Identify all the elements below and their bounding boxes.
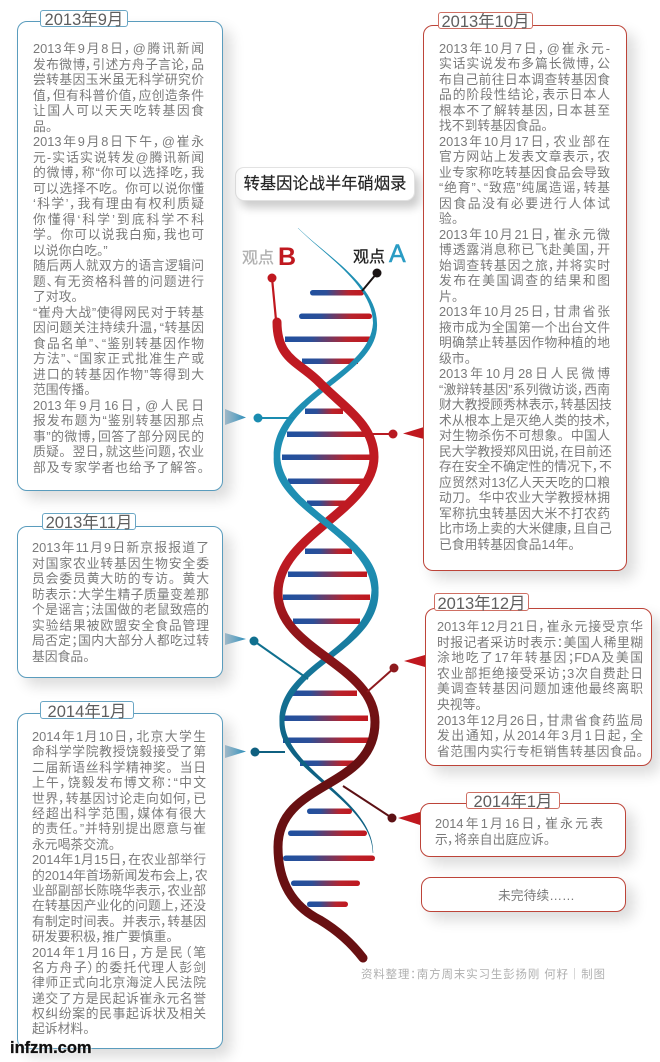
text: October events: “绝育”、“致癌”纯属造谣，转基: [439, 180, 610, 195]
heading: 2013年9月: 2013年9月: [45, 10, 123, 28]
text: January events viewpoint A: 有制定时间表。并表示，转基因: [32, 914, 206, 929]
text: November events: 局否定；国内大部分人都吃过转: [32, 633, 209, 648]
text: December events: 2013年12月26日，甘肃省食药监局: [437, 713, 643, 728]
text: October events: 业专家称吃转基因食品会导致: [439, 165, 610, 180]
text: to be continued: 未完待续……: [498, 888, 575, 903]
text: October events: 比市场上卖的大米健康，且自己: [439, 521, 612, 536]
text: December events: 2013年12月21日，崔永元接受京华: [437, 619, 643, 634]
label: viewpoint A: [353, 240, 406, 268]
heading: 2014年1月: 2014年1月: [474, 792, 552, 810]
text: October events: 明确禁止转基因作物种植的地: [439, 335, 610, 350]
text: September events: 发布微博，引述方舟子言论，品: [33, 57, 204, 72]
text: September events: [33, 41, 204, 475]
text: October events: 找不到转基因食品。: [439, 118, 548, 133]
title: [235, 167, 415, 201]
text: September events: 让国人可以天天吃转基因食: [33, 103, 204, 118]
text: January events viewpoint A: 的责任。”并特别提出愿意与崔: [32, 821, 206, 836]
text: September events: 随后两人就双方的语言逻辑问: [33, 258, 204, 273]
text: November events: 实验结果被欧盟安全食品管理: [32, 618, 209, 633]
text: December events: [437, 619, 643, 759]
text: December events: 央视等。: [437, 697, 482, 712]
text: January events viewpoint A: 递交了方是民起诉崔永元名誉: [32, 991, 206, 1006]
text: October events: 级市。: [439, 351, 471, 366]
text: January events viewpoint A: 永元喝茶交流。: [32, 837, 115, 852]
text: September events: 方法”、“国家正式批准生产或: [33, 351, 204, 366]
text: September events: 因问题关注持续升温，“转基因: [33, 320, 204, 335]
text: January events viewpoint A: 业部副部长陈晓华表示，农业部: [32, 883, 206, 898]
heading: 2013年11月: 2013年11月: [46, 514, 132, 532]
panel: September 2013: [17, 10, 236, 504]
strand B (red): [277, 322, 375, 958]
text: November events: 个是谣言；法国做的老鼠致癌的: [32, 602, 209, 617]
text: October events: 2013年10月17日，农业部在: [439, 134, 610, 149]
text: September events: 学。你可以说我白痴，我也可: [33, 227, 204, 242]
text: September events: 进口的转基因作物”等得到大: [33, 367, 204, 382]
panel: to be continued: [421, 877, 638, 924]
text: September events: 部及专家学者也给予了解答。: [33, 460, 204, 475]
text: October events: 掖市成为全国第一个出台文件: [439, 320, 610, 335]
text: September events: 值，但有科普价值，应创造条件: [33, 88, 204, 103]
arrow: January 2014 right to helix: [343, 786, 420, 825]
text: January events viewpoint A: [32, 729, 208, 1036]
text: September events: 题、有无资格科普的问题进行: [33, 274, 204, 289]
text: September events: 你懂得‘科学’到底科学不科: [33, 212, 204, 227]
text: October events: 民大学教授郑风田说，在目前还: [439, 444, 612, 459]
heading: 2013年10月: 2013年10月: [441, 12, 530, 30]
text: January events viewpoint A: 上午，饶毅发布博文称：“中文: [32, 775, 206, 790]
text: October events: 对生物杀伤不可想象。中国人: [439, 428, 610, 443]
text: September events: 报发布题为“鉴别转基因那点: [33, 413, 204, 428]
text: October events: [439, 41, 612, 552]
text: November events: 2013年11月9日新京报报道了: [32, 540, 209, 555]
text: January events viewpoint A: 2014年1月16日，方是民（笔: [32, 945, 206, 960]
connector: viewpoint B pin: [268, 274, 276, 320]
text: October events: 2013年10月28日人民微博: [439, 366, 610, 381]
text: November events: 对国家农业转基因生物安全委: [32, 556, 209, 571]
panel: October 2013: [423, 12, 640, 584]
text: September events: 可以选择不吃。你可以说你懂: [33, 181, 204, 196]
text: January events viewpoint A: 二届新语丝科学精神奖。当日: [32, 760, 206, 775]
text: September events: 2013年9月16日，@人民日: [33, 398, 204, 413]
DNA helix diagram with connectors: [225, 228, 425, 962]
text: October events: 2013年10月7日，@崔永元-: [439, 41, 610, 56]
arrow: November 2013 to helix: [225, 633, 308, 679]
text: December events: 美调查转基因问题加速他最终离职: [437, 681, 643, 696]
text: January events viewpoint A: 世界，转基因讨论走向如何，已: [32, 791, 206, 806]
label: viewpoint A: 观点: [353, 248, 385, 266]
text: October events: 博透露消息称已飞赴美国，开: [439, 242, 610, 257]
text: November events: 昉表示：大学生精子质量变差那: [32, 587, 209, 602]
arrow: September 2013 to helix: [225, 409, 294, 425]
text: October events: 已食用转基因食品14年。: [439, 537, 575, 552]
watermark: infzm.com: infzm.com: [10, 1039, 92, 1057]
text: September events: 2013年9月8日下午，@崔永: [33, 134, 204, 149]
text: January events viewpoint A: 2014年1月10日，北京大学生: [32, 729, 206, 744]
text: September events: 2013年9月8日，@腾讯新闻: [33, 41, 204, 56]
text: September events: 品。: [33, 119, 52, 134]
title: 转基因论战半年硝烟录: [244, 175, 406, 193]
strand A overlap at middle crossing: [295, 498, 358, 546]
text: January events viewpoint A: 名方舟子）的委托代理人彭剑: [32, 960, 206, 975]
text: October events: 存在安全不确定性的情况下，不: [439, 459, 612, 474]
text: January events viewpoint A: 命科学学院教授饶毅接受了第: [32, 744, 206, 759]
text: January events viewpoint A: 权纠纷案的民事起诉状及相关: [32, 1006, 206, 1021]
label: viewpoint B: [242, 243, 296, 271]
heading: 2013年12月: 2013年12月: [437, 594, 526, 612]
text: October events: 因食品没有必要进行人体试: [439, 196, 610, 211]
text: September events: 尝转基因玉米虽无科学研究价: [33, 72, 204, 87]
text: October events: 验。: [439, 211, 458, 226]
text: January events viewpoint A: 在转基因产业化的问题上，还没: [32, 898, 206, 913]
arrow: January 2014 left to helix: [225, 745, 285, 758]
text: September events: ‘科学’，我有理由有权利质疑: [33, 196, 204, 211]
arrow: December 2013 to helix: [367, 655, 425, 692]
text: September events: 以说你白吃。”: [33, 243, 108, 258]
arrow: October 2013 to helix: [372, 427, 424, 439]
panel: January 2014 (right): [420, 792, 638, 870]
label: viewpoint B: B: [278, 243, 296, 271]
base-pair rungs: [282, 290, 375, 907]
text: October events: 军称抗虫转基因大米不打农药: [439, 506, 610, 521]
text: November events: [32, 540, 209, 664]
text: January events viewpoint A: 律师正式向北京海淀人民法院: [32, 975, 206, 990]
text: October events: 2013年10月21日，崔永元微: [439, 227, 610, 242]
text: September events: 质疑。翌日，就这些问题，农业: [33, 444, 204, 459]
text: January events viewpoint A: 经超出科学范围，媒体有很大: [32, 806, 206, 821]
text: December events: 发出通知，从2014年3月1日起，全: [437, 728, 643, 743]
connector: viewpoint A pin: [362, 268, 382, 291]
label: viewpoint B: 观点: [242, 249, 274, 267]
text: January events viewpoint B: 示，将亲自出庭应诉。: [435, 832, 550, 847]
text: December events: 省范围内实行专柜销售转基因食品。: [437, 744, 643, 759]
panel: January 2014 (left): [17, 701, 236, 1062]
text: October events: 发布在美国调查的结果和图: [439, 273, 610, 288]
text: January events viewpoint A: 研发要积极，推广要慎重。: [32, 929, 173, 944]
text: December events: 涂地吃了17年转基因；FDA及美国: [437, 650, 643, 665]
text: September events: 了对攻。: [33, 289, 78, 304]
text: October events: 品的阶段性结论，表示日本人: [439, 87, 610, 102]
text: October events: 应贸然对13亿人天天吃的口粮: [439, 475, 610, 490]
text: October events: 始调查转基因之旅，并将实时: [439, 258, 610, 273]
heading: 2014年1月: 2014年1月: [48, 702, 126, 720]
text: September events: 的微博，称“你可以选择吃，我: [33, 165, 204, 180]
text: September events: 食品名单”、“鉴别转基因作物: [33, 336, 204, 351]
strand A (blue): [274, 228, 379, 853]
text: October events: 动刀。华中农业大学教授林拥: [439, 490, 610, 505]
text: November events: 基因食品。: [32, 649, 90, 664]
panel: November 2013: [17, 513, 236, 690]
label: viewpoint A: A: [389, 240, 406, 268]
text: December events: 时报记者采访时表示：美国人稀里糊: [437, 635, 643, 650]
text: September events: “崔舟大战”使得网民对于转基: [33, 305, 204, 320]
text: September events: 范围传播。: [33, 382, 91, 397]
text: October events: 官方网站上发表文章表示，农: [439, 149, 610, 164]
text: January events viewpoint A: 2014年1月15日，在农业部举行: [32, 852, 206, 867]
text: December events: 农业部拒绝接受采访；3次自费赴日: [437, 666, 643, 681]
text: January events viewpoint A: 的2014年首场新闻发布会上，农: [32, 868, 208, 883]
text: September events: 事”的微博，回答了部分网民的: [33, 429, 204, 444]
text: October events: 术从根本上是灭绝人类的技术，: [439, 413, 612, 428]
text: January events viewpoint B: [435, 816, 603, 847]
text: October events: 财大教授顾秀林表示，转基因技: [439, 397, 612, 412]
text: January events viewpoint A: 起诉材料。: [32, 1021, 90, 1036]
source credit: 资料整理：南方周末实习生彭扬刚 何籽｜制图: [361, 969, 605, 981]
panel: December 2013: [425, 593, 660, 778]
text: October events: 根本不了解转基因，日本甚至: [439, 103, 610, 118]
text: October events: 实话实说发布多篇长微博，公: [439, 56, 610, 71]
text: September events: 元-实话实说转发@腾讯新闻: [33, 150, 204, 165]
text: October events: 2013年10月25日，甘肃省张: [439, 304, 610, 319]
text: November events: 员会委员黄大昉的专访。黄大: [32, 571, 209, 586]
text: October events: 布自己前往日本调查转基因食: [439, 72, 610, 87]
text: October events: “激辩转基因”系列微访谈，西南: [439, 382, 610, 397]
text: October events: 片。: [439, 289, 458, 304]
text: January events viewpoint B: 2014年1月16日，崔永元表: [435, 816, 603, 831]
